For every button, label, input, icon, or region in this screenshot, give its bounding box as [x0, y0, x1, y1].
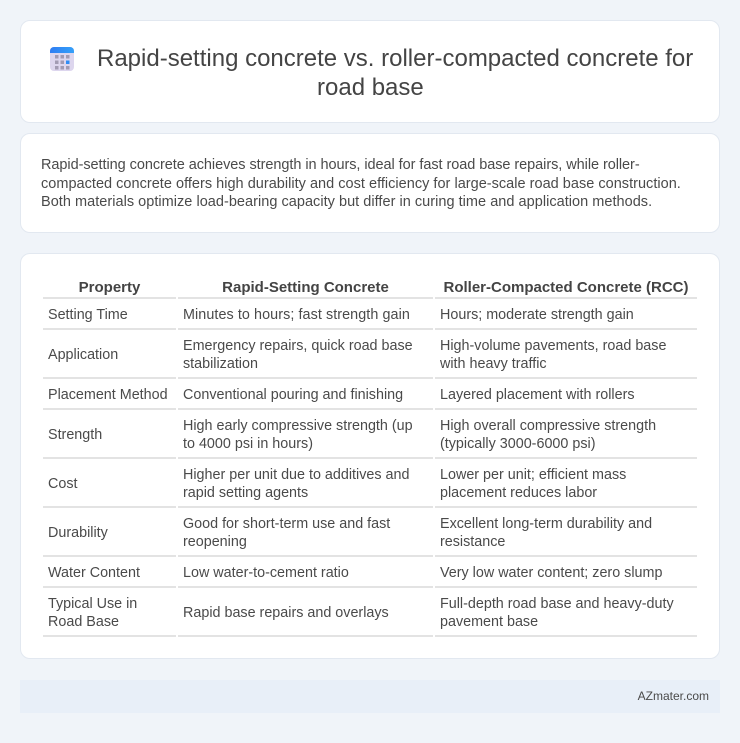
text: Very low water content; zero slump — [440, 565, 662, 581]
summary text: Rapid-setting concrete achieves strength in hours, ideal for fast road base repairs, while roller- — [41, 157, 640, 173]
text: placement reduces labor — [440, 485, 597, 501]
text: Placement Method — [48, 387, 168, 403]
title: Rapid-setting concrete vs. roller-compacted concrete for — [97, 45, 693, 72]
summary text — [41, 157, 681, 210]
title — [97, 45, 693, 101]
text: resistance — [440, 534, 505, 550]
row: cost — [48, 467, 626, 501]
text: Full-depth road base and heavy-duty — [440, 596, 674, 612]
text: rapid setting agents — [183, 485, 308, 501]
row: application — [48, 338, 666, 372]
text: reopening — [183, 534, 247, 550]
comparison table: Roller-Compacted Concrete (RCC) — [443, 279, 689, 296]
row: strength — [48, 418, 656, 452]
comparison table: Property — [79, 279, 140, 296]
footer text: AZmater.com — [638, 689, 709, 703]
text: High early compressive strength (up — [183, 418, 413, 434]
text: High-volume pavements, road base — [440, 338, 666, 354]
text: Strength — [48, 427, 102, 443]
footer bar — [20, 680, 720, 713]
summary card — [20, 133, 720, 233]
text: Typical Use in — [48, 596, 137, 612]
text: High overall compressive strength — [440, 418, 656, 434]
text: Hours; moderate strength gain — [440, 307, 634, 323]
text: pavement base — [440, 614, 538, 630]
text: Water Content — [48, 565, 140, 581]
icon: calendar — [50, 47, 74, 71]
comparison table: Rapid-Setting Concrete — [222, 279, 389, 296]
comparison table — [79, 279, 689, 296]
text: Good for short-term use and fast — [183, 516, 390, 532]
text: Minutes to hours; fast strength gain — [183, 307, 410, 323]
text: Excellent long-term durability and — [440, 516, 652, 532]
row: placement method — [48, 387, 635, 403]
text: Setting Time — [48, 307, 128, 323]
text: stabilization — [183, 356, 258, 372]
title card — [20, 20, 720, 123]
text: Rapid base repairs and overlays — [183, 605, 389, 621]
text: Durability — [48, 525, 108, 541]
table card — [20, 253, 720, 659]
text: (typically 3000-6000 psi) — [440, 436, 595, 452]
text: Emergency repairs, quick road base — [183, 338, 413, 354]
summary text: Both materials optimize load-bearing capacity but differ in curing time and application methods. — [41, 194, 652, 210]
row: durability — [48, 516, 652, 550]
summary text: compacted concrete offers high durability and cost efficiency for large-scale road base construction. — [41, 176, 681, 192]
text: to 4000 psi in hours) — [183, 436, 313, 452]
text: Higher per unit due to additives and — [183, 467, 409, 483]
text: Cost — [48, 476, 78, 492]
text: Lower per unit; efficient mass — [440, 467, 626, 483]
title: road base — [317, 74, 424, 101]
text: Conventional pouring and finishing — [183, 387, 403, 403]
text: Road Base — [48, 614, 119, 630]
text: Layered placement with rollers — [440, 387, 635, 403]
text: Application — [48, 347, 118, 363]
row: setting time — [48, 307, 634, 323]
row: water content — [48, 565, 662, 581]
text: Low water-to-cement ratio — [183, 565, 349, 581]
text: with heavy traffic — [440, 356, 547, 372]
row: typical use — [48, 596, 674, 630]
